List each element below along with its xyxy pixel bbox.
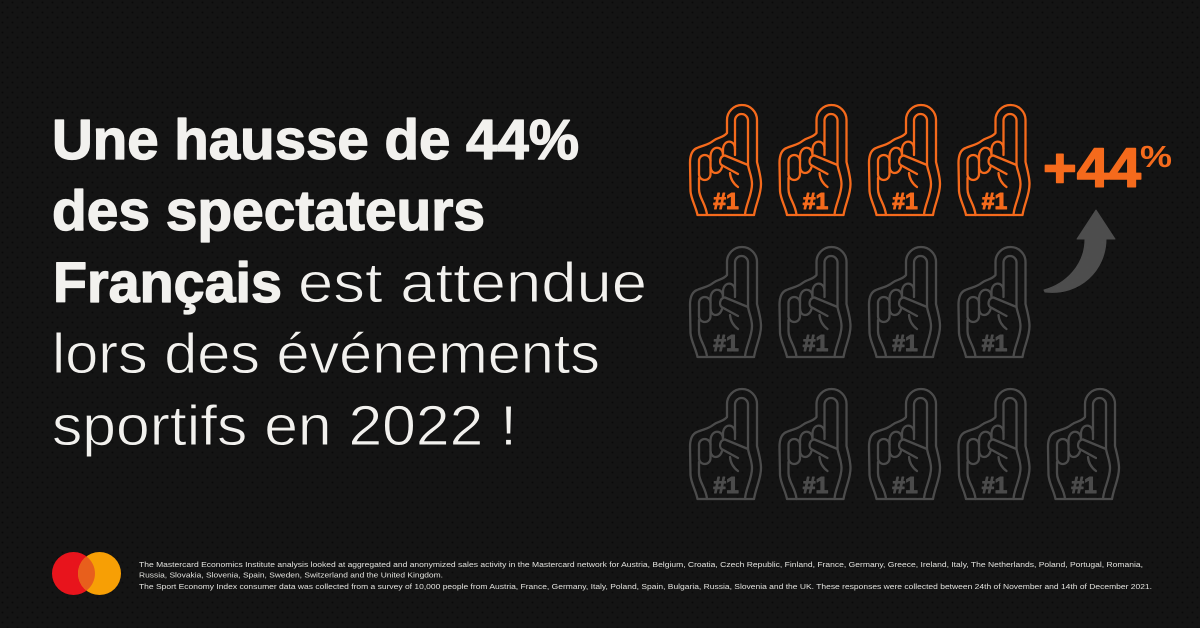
title: Français	[53, 251, 282, 315]
title: Une hausse de 44%	[52, 108, 579, 172]
footnote text: Russia, Slovakia, Slovenia, Spain, Sweden, Switzerland and the United Kingdom.	[139, 570, 443, 580]
title: est attendue	[298, 251, 647, 315]
icon: grey foam finger row 2 col 1	[690, 247, 761, 357]
icon: orange foam finger 4: #1	[982, 188, 1007, 214]
callout: +44%: +44	[1043, 136, 1141, 199]
footnote text: The Sport Economy Index consumer data was collected from a survey of 10,000 people from Austria, France, Germany, Italy, Poland, Spain, Bulgaria, Russia, Slovenia and the UK. These responses were collected between 24th of November and 14th of December 2021.	[139, 582, 1152, 591]
arrow: curved up	[1044, 210, 1115, 292]
title	[52, 108, 647, 458]
title: sportifs en 2022 !	[52, 394, 517, 458]
icon: orange foam finger 4	[958, 105, 1030, 215]
icon: grey foam finger row 2 col 2: #1	[803, 330, 828, 356]
title: des spectateurs	[52, 179, 485, 243]
icon: grey foam finger row 3 col 3: #1	[892, 472, 918, 498]
callout: +44%: %	[1140, 139, 1172, 174]
icon: grey foam finger row 2 col 4: #1	[982, 330, 1007, 356]
icon grid: foam fingers	[690, 105, 1119, 499]
icon: grey foam finger row 3 col 4	[958, 389, 1030, 499]
icon: grey foam finger row 3 col 3	[869, 389, 940, 499]
icon: grey foam finger row 2 col 4	[958, 247, 1030, 357]
icon: grey foam finger row 2 col 3	[869, 247, 940, 357]
icon: orange foam finger 1: #1	[713, 188, 739, 214]
icon: grey foam finger row 3 col 2	[780, 389, 850, 499]
icon: grey foam finger row 2 col 1: #1	[713, 330, 739, 356]
icon: grey foam finger row 3 col 5	[1048, 389, 1119, 499]
icon: grey foam finger row 3 col 1	[690, 389, 761, 499]
icon: grey foam finger row 3 col 2: #1	[803, 472, 828, 498]
footnote text	[139, 560, 1152, 591]
icon: grey foam finger row 2 col 3: #1	[892, 330, 918, 356]
icon: orange foam finger 1	[690, 105, 761, 215]
icon: orange foam finger 3: #1	[892, 188, 918, 214]
icon: grey foam finger row 3 col 4: #1	[982, 472, 1007, 498]
icon: grey foam finger row 3 col 1: #1	[713, 472, 739, 498]
footnote text: The Mastercard Economics Institute analysis looked at aggregated and anonymized sales activity in the Mastercard network for Austria, Belgium, Croatia, Czech Republic, Finland, France, Germany, Greece, Ireland, Italy, The Netherlands, Poland, Portugal, Romania,	[139, 560, 1143, 569]
icon: orange foam finger 2: #1	[803, 188, 828, 214]
icon: orange foam finger 2	[780, 105, 850, 215]
title: lors des événements	[52, 322, 600, 386]
icon: grey foam finger row 3 col 5: #1	[1071, 472, 1097, 498]
icon: grey foam finger row 2 col 2	[780, 247, 850, 357]
logo: Mastercard	[52, 552, 121, 595]
icon: orange foam finger 3	[869, 105, 940, 215]
